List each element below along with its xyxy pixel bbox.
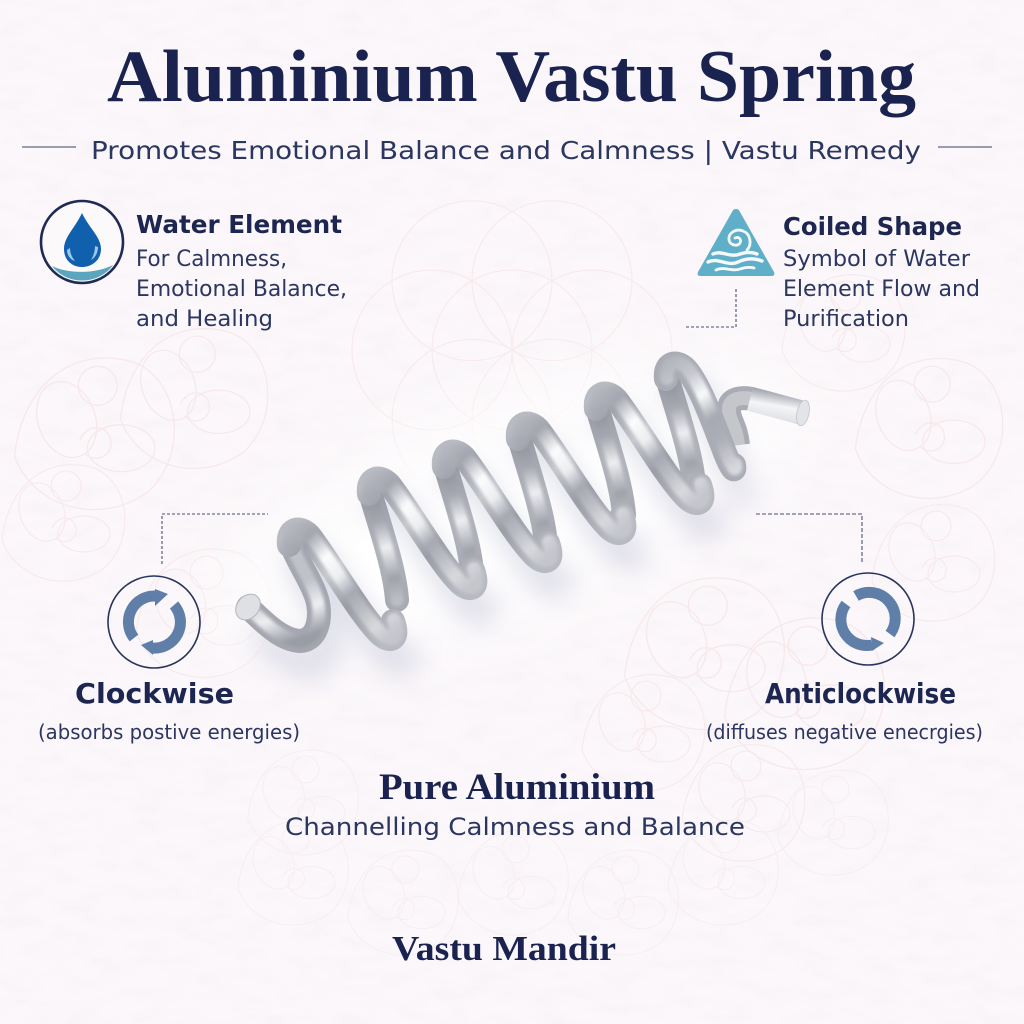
subtitle: Promotes Emotional Balance and Calmness | Vastu Remedy [91,136,921,165]
panel: clockwise [38,514,300,744]
white glow behind spring [196,314,824,706]
spring end: left cap [231,589,265,625]
spring back strands [248,377,694,641]
dashed leader: coiled shape [686,289,736,327]
title: Aluminium Vastu Spring [107,36,916,118]
brand name: Vastu Mandir [392,929,616,968]
text block: (diffuses negative enecrgies) [706,720,983,744]
panel: anticlockwise [706,514,983,744]
spring shadow [258,388,744,665]
dashed leader: anticlockwise [756,514,862,564]
text block: For Calmness, [136,247,287,272]
text block: Emotional Balance, [136,277,347,302]
text block: and Healing [136,307,273,332]
icon: water drop [41,201,123,283]
text block [136,247,347,332]
heading: Water Element [136,210,342,239]
text block: Purification [783,307,909,332]
spring illustration [231,363,812,665]
dashed leader: clockwise [162,514,268,564]
icon: anticlockwise arrows [822,573,914,665]
text block: (absorbs postive energies) [38,720,300,744]
panel: coiled shape [686,209,980,332]
panel: water element [41,201,347,332]
text block: channelling: Channelling Calmness and Balance [285,813,745,841]
text block [783,247,980,332]
icon: clockwise arrows [108,576,200,668]
icon: triangle with spiral and waves [698,209,774,276]
faint mandala line pattern [2,201,1003,861]
spring end: right hook [729,398,812,445]
text block: Element Flow and [783,277,980,302]
heading: Coiled Shape [783,212,962,241]
heading: pure aluminium: Pure Aluminium [379,767,655,808]
faint lower mandala [238,750,888,955]
heading: Clockwise [75,677,234,710]
heading: Anticlockwise [765,677,956,710]
spring front strands [289,363,735,639]
text block: Symbol of Water [783,247,971,272]
